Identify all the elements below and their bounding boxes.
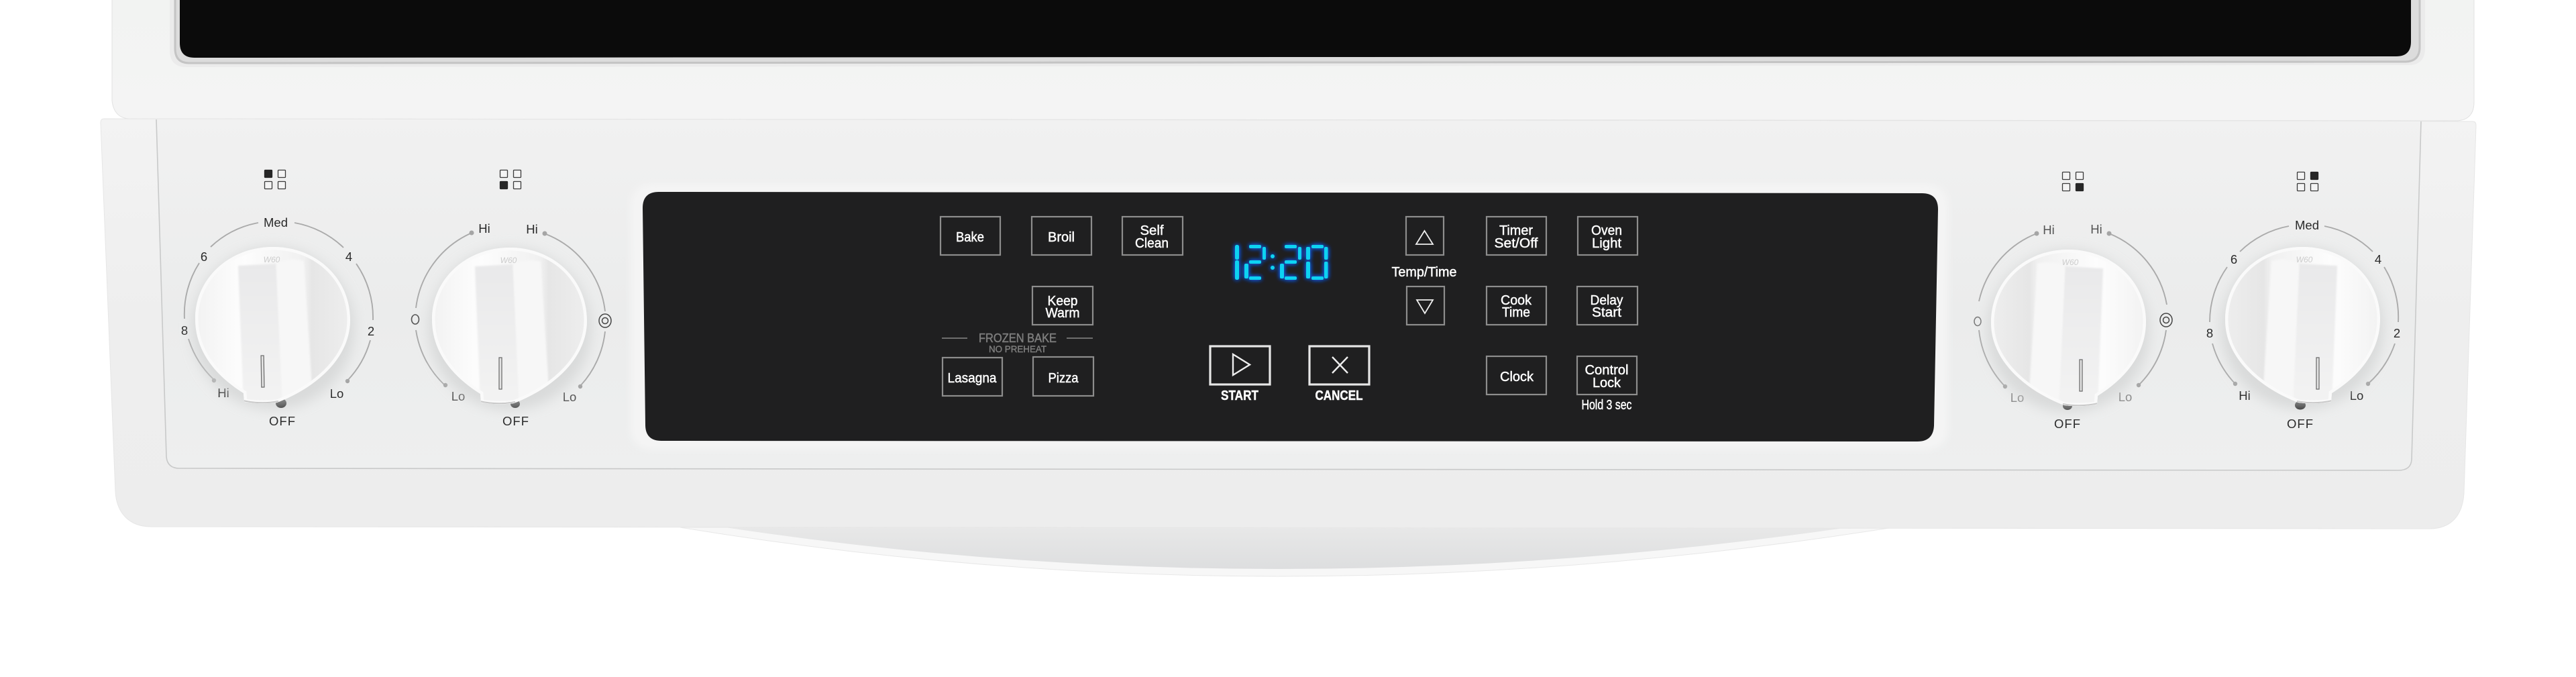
button: Oven Light: Light [1592,236,1621,251]
dial scale: 8 [181,323,188,337]
dial scale: 6 [201,250,207,264]
dial scale [2206,218,2400,431]
button: Control Lock: Control [1585,363,1629,378]
button: Oven Light: Oven [1591,223,1622,238]
button: Pizza [1033,357,1093,396]
dial scale: 6 [2231,252,2237,266]
frozen bake heading: FROZEN BAKE [979,331,1057,345]
button: Cook Time: Cook [1501,293,1532,308]
knob: W60 [264,255,280,264]
button: Lasagna [943,358,1002,396]
frozen bake heading: NO PREHEAT [989,344,1046,354]
dial scale [1974,222,2172,431]
dial scale: OFF [502,414,529,428]
button: Delay Start [1577,287,1638,325]
button: Clock: Clock [1500,370,1534,384]
dial scale: OFF [269,414,296,428]
knob [2221,247,2383,409]
button: temperature up [1406,217,1444,255]
button: Timer Set/Off [1487,217,1546,255]
dial scale: Med [264,215,288,229]
knob: W60 [500,256,517,265]
button: Lasagna: Lasagna [947,371,997,386]
knob [429,248,591,410]
dial scale [412,221,611,428]
dial scale: Lo [451,389,465,403]
button: Bake: Bake [956,230,984,245]
dial scale: OFF [2054,417,2081,431]
button: Oven Light [1578,217,1638,255]
button: Clock [1487,356,1546,395]
dial scale [181,215,374,428]
button: Broil: Broil [1048,230,1075,245]
dial scale: Lo [2010,390,2024,405]
button: Control Lock: Lock [1593,376,1621,390]
button: Delay Start: Delay [1590,293,1623,308]
dial scale: Hi [217,386,229,400]
dial scale: Hi [478,221,490,236]
knob: W60 [2062,258,2079,267]
control panel housing [101,119,2476,529]
button: Cook Time: Time [1502,305,1530,320]
button: temperature down [1407,287,1444,325]
dial scale: Hi [526,222,538,236]
icon: burner position [2297,172,2318,191]
button: Control Lock [1577,356,1637,395]
oven door handle [680,527,1893,576]
icon: burner position [2062,172,2084,191]
dial scale: Med [2295,218,2319,232]
label: Hold 3 sec: Hold 3 sec [1582,398,1631,413]
dial scale: Hi [2043,223,2055,237]
dial scale: Hi [2239,388,2251,403]
dial scale: Lo [2350,388,2363,403]
button: Keep Warm: Warm [1045,306,1080,321]
burner dial: right rear [2206,172,2400,431]
button: Self Clean: Self [1140,223,1164,238]
button: Cancel [1309,346,1369,403]
dial scale: OFF [2287,417,2314,431]
dial scale: 4 [345,250,352,264]
dial scale: 8 [2206,326,2213,340]
burner dial: left front dual element [412,170,611,428]
label: Temp/Time: Temp/Time [1391,265,1457,280]
knob [192,247,354,409]
dial scale: Hi [2090,222,2102,236]
button: Broil [1032,217,1091,255]
panel: black control display [643,192,1938,441]
cooktop body [112,0,2474,121]
icon: burner position [500,170,521,189]
button: Start [1210,346,1270,403]
frozen bake heading [942,331,1093,354]
button: Keep Warm [1032,287,1093,325]
button: Cook Time [1487,287,1546,325]
button: Cancel: CANCEL [1315,388,1363,403]
burner dial: left rear [181,170,374,428]
dial scale: Lo [563,390,576,404]
button: Timer Set/Off: Timer [1499,223,1533,238]
dial scale: 4 [2375,252,2381,266]
button: Start: START [1221,388,1258,403]
knob [1987,250,2149,412]
button: Self Clean: Clean [1135,236,1169,251]
clock display 12:20 [1235,245,1328,280]
burner dial: right front dual element [1974,172,2172,431]
button: Timer Set/Off: Set/Off [1495,236,1538,251]
dial scale: Lo [2118,390,2132,404]
dial scale: Lo [330,386,343,401]
button: Self Clean [1122,217,1183,255]
knob: W60 [2296,255,2313,264]
icon: burner position [264,170,286,189]
button: Delay Start: Start [1592,305,1621,320]
dial scale: 2 [368,324,374,338]
button: Pizza: Pizza [1048,371,1079,386]
display bevel [631,184,1948,450]
button: Bake [941,217,1000,255]
glass cooktop with silver frame [170,0,2425,67]
dial scale: 2 [2394,326,2400,340]
button: Keep Warm: Keep [1048,294,1077,309]
